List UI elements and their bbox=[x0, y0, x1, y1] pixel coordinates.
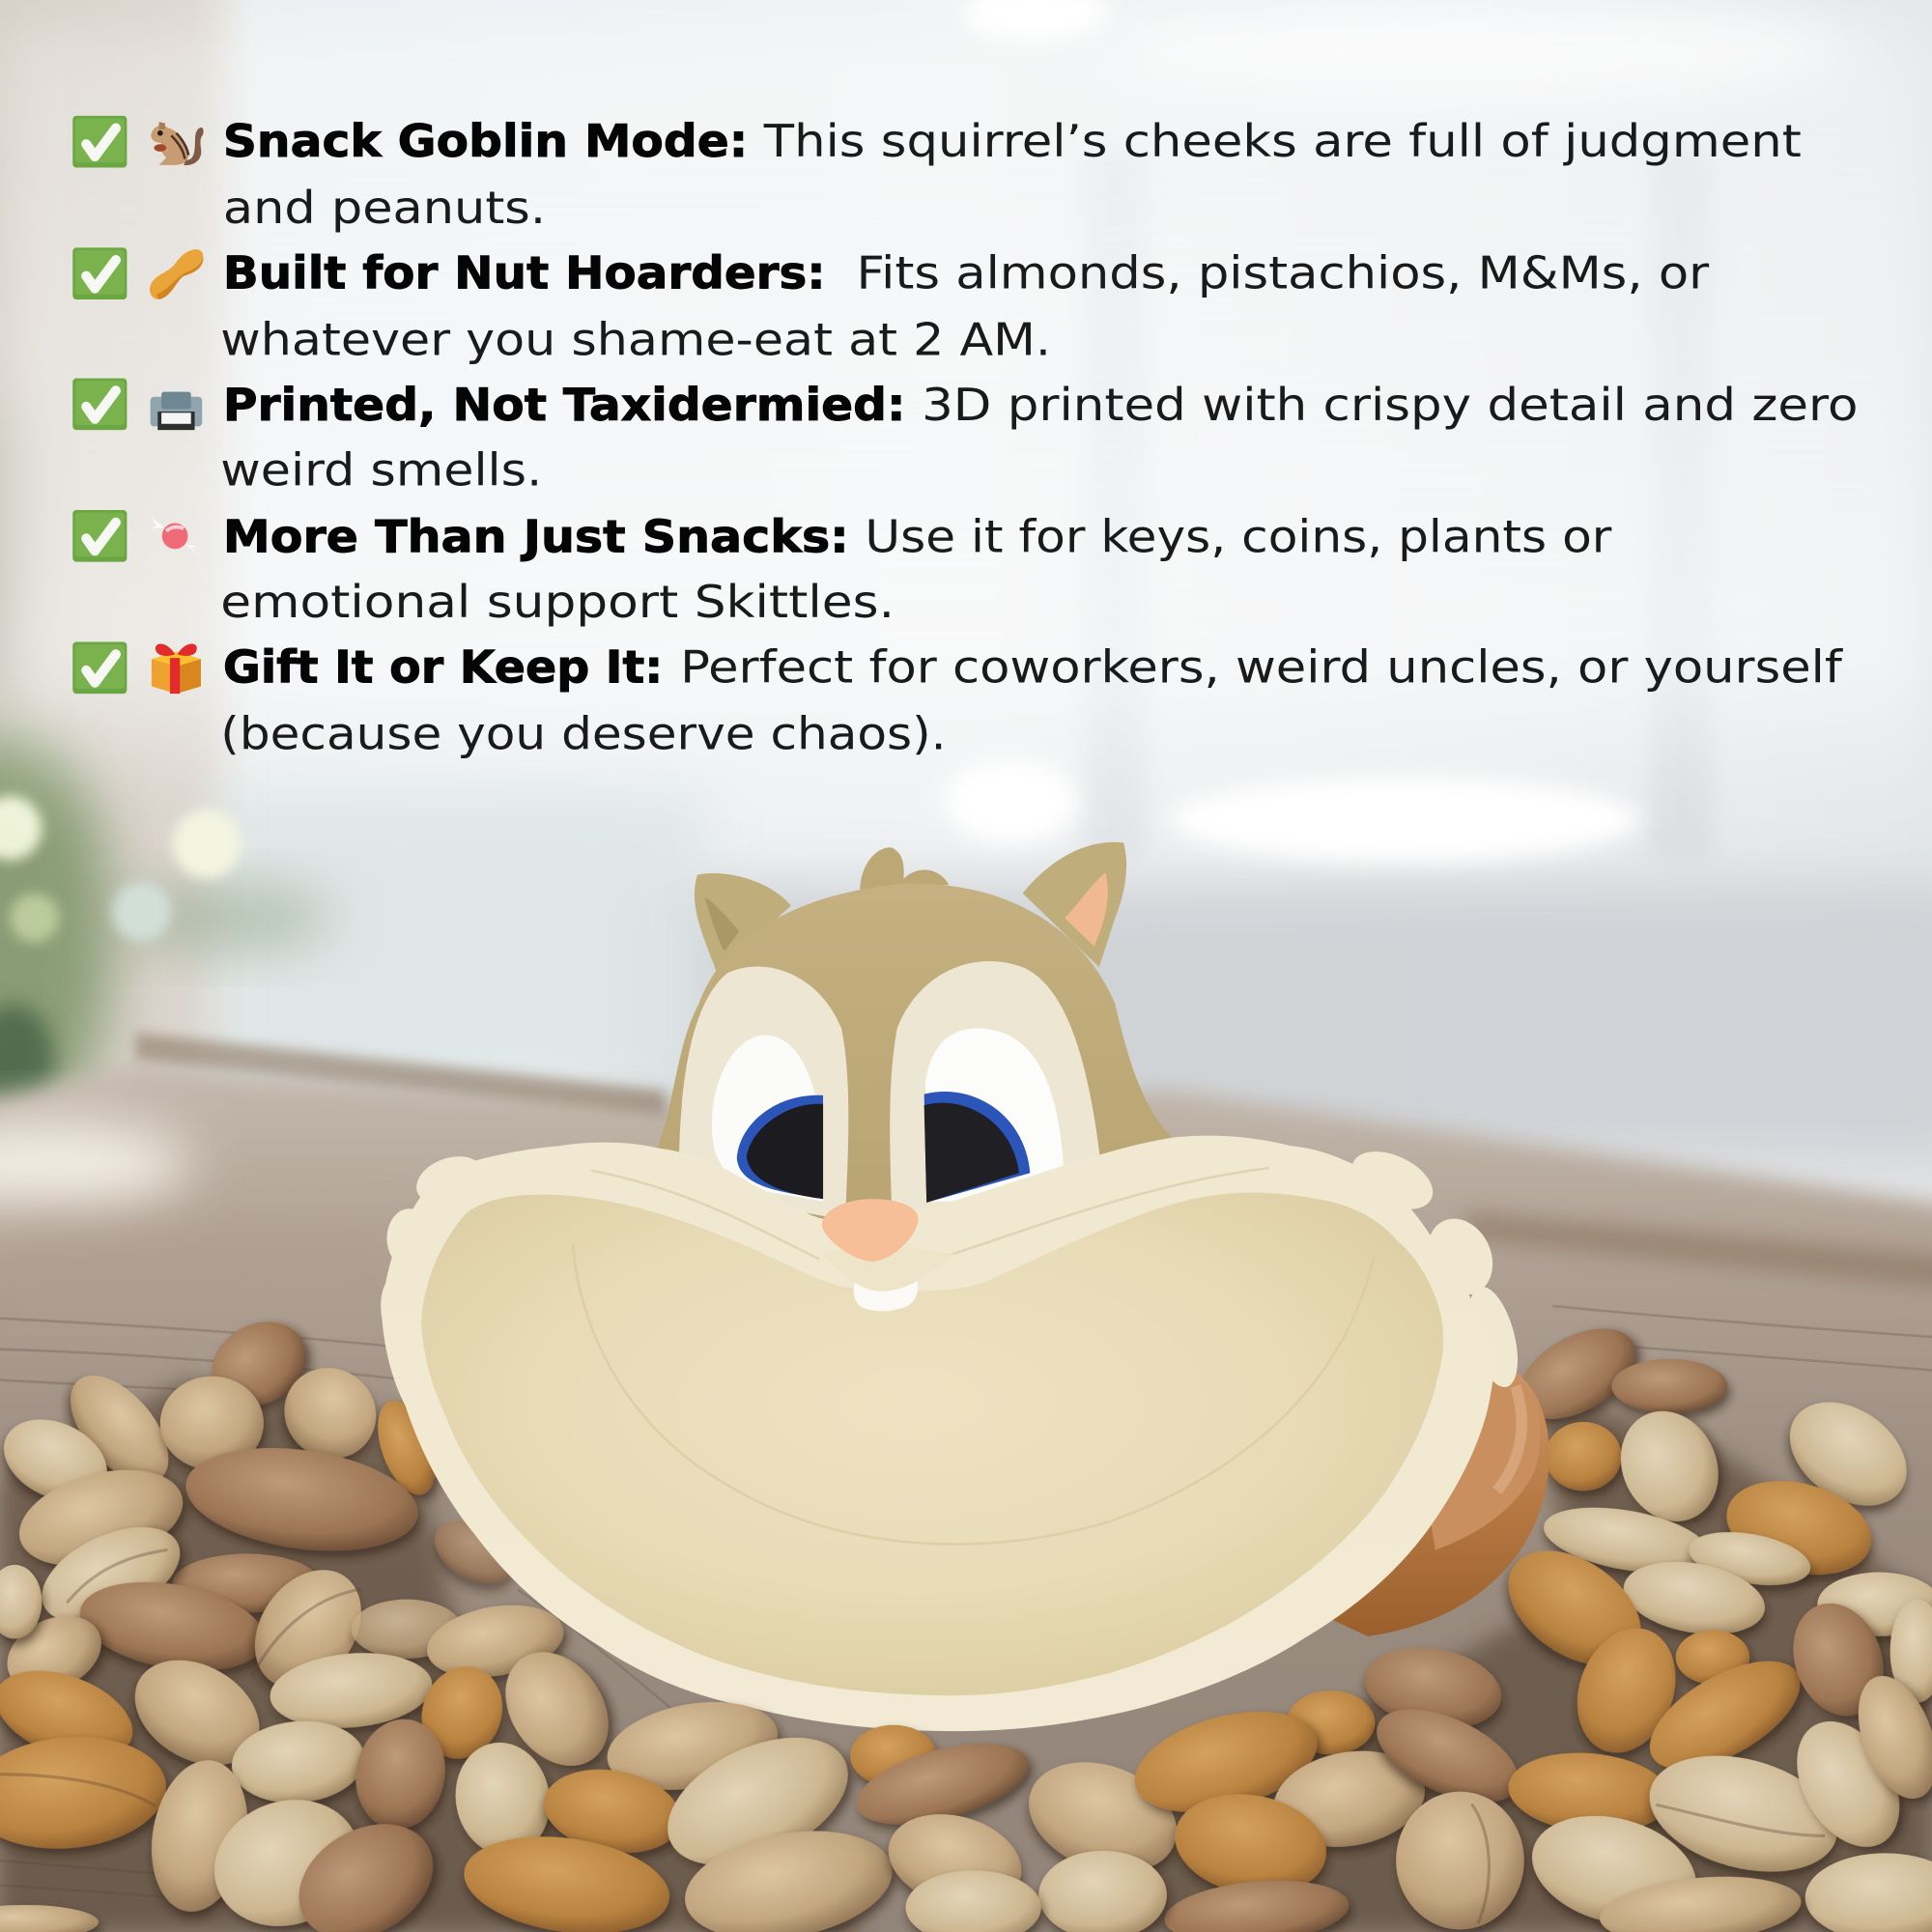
icon: check mark 4 bbox=[72, 510, 127, 562]
feature 1 text bbox=[223, 115, 1802, 234]
shadows beneath nut piles bbox=[0, 1380, 1932, 1932]
feature 4 text: Use it for keys, coins, plants or bbox=[865, 510, 1611, 562]
feature list bbox=[72, 115, 1858, 760]
feature 2 text: whatever you shame-eat at 2 AM. bbox=[220, 313, 1051, 365]
tooth bbox=[854, 1279, 918, 1311]
feature 3 text: Printed, Not Taxidermied: bbox=[223, 379, 905, 431]
feature 1 text: and peanuts. bbox=[223, 182, 546, 234]
right face patch bbox=[890, 961, 1103, 1220]
feature 3 text: weird smells. bbox=[220, 444, 542, 497]
head tuft bbox=[860, 847, 949, 890]
feature 2 text bbox=[220, 246, 1709, 365]
icon: check mark 3 bbox=[72, 379, 127, 430]
feature 5 text: Gift It or Keep It: bbox=[223, 641, 663, 694]
icon: chipmunk bbox=[151, 122, 204, 165]
feature 5 text bbox=[220, 641, 1844, 760]
bowl interior bbox=[421, 1193, 1443, 1695]
feature 2 text: Fits almonds, pistachios, M&Ms, or bbox=[856, 246, 1709, 298]
feature 5 text: Perfect for coworkers, weird uncles, or yourself bbox=[680, 641, 1844, 694]
icon: peanut bbox=[150, 249, 203, 299]
feature 4 text: emotional support Skittles. bbox=[220, 576, 895, 628]
feature 4 text: More Than Just Snacks: bbox=[223, 510, 849, 562]
left ear bbox=[695, 873, 791, 974]
blurred foliage bbox=[0, 394, 332, 1146]
icon: check mark 1 bbox=[72, 116, 127, 167]
feature 3 text: 3D printed with crispy detail and zero bbox=[922, 379, 1858, 431]
feature 1 text: This squirrel’s cheeks are full of judgment bbox=[763, 115, 1802, 167]
feature 1 text: Snack Goblin Mode: bbox=[223, 115, 748, 167]
lower lip cover bbox=[823, 1247, 955, 1292]
icon: candy bbox=[151, 518, 201, 557]
squirrel tail behind bowl bbox=[1293, 1361, 1549, 1636]
feature 2 text: Built for Nut Hoarders: bbox=[223, 246, 826, 298]
interior molded line bbox=[573, 1244, 1374, 1545]
bowl bbox=[381, 1136, 1527, 1731]
white text wash bbox=[0, 25, 1932, 813]
right pupil bbox=[924, 1092, 1030, 1203]
bowl rim bbox=[382, 1136, 1493, 1731]
icon: check mark 2 bbox=[72, 247, 127, 299]
right ear bbox=[1023, 842, 1126, 967]
feature 5 text: (because you deserve chaos). bbox=[220, 708, 947, 760]
feature 3 text bbox=[220, 379, 1858, 497]
icon: printer bbox=[151, 381, 202, 430]
wooden table bbox=[0, 1033, 1932, 1932]
left face patch bbox=[679, 966, 848, 1220]
cheek fur bumps bbox=[381, 1140, 1527, 1392]
left pupil bbox=[737, 1095, 823, 1199]
pile of nuts, front layer bbox=[0, 1591, 1932, 1932]
icon: check mark 5 bbox=[72, 642, 127, 694]
squirrel head bbox=[653, 842, 1180, 1244]
head shape bbox=[653, 883, 1180, 1244]
mouth lip texture bbox=[591, 1168, 1269, 1260]
left eye white bbox=[712, 1035, 823, 1202]
blurred window highlights bbox=[943, 0, 1848, 863]
pile of nuts, back layer bbox=[0, 1305, 1932, 1708]
nose bbox=[822, 1199, 919, 1262]
right eye white bbox=[925, 1029, 1065, 1202]
feature 4 text bbox=[220, 510, 1611, 628]
icon: gift bbox=[152, 643, 201, 694]
